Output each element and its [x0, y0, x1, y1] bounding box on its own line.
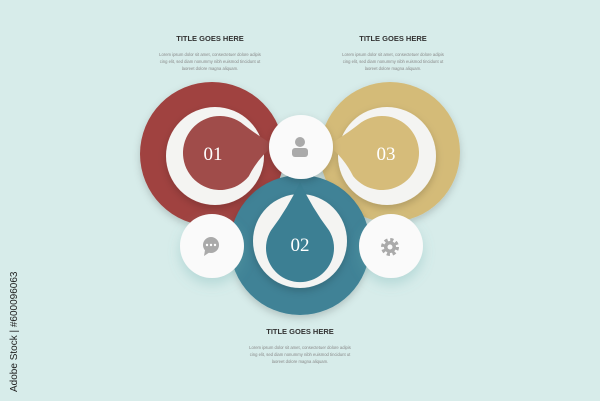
text block: top left	[159, 34, 261, 71]
text block: top left: laoreet dolore magna aliquam.	[182, 66, 238, 71]
text block: top right: cing elit, sed diam nonummy nibh euismod tincidunt ut	[343, 59, 444, 64]
text block: top left: cing elit, sed diam nonummy nibh euismod tincidunt ut	[160, 59, 261, 64]
icon: chat in left circle	[180, 214, 244, 278]
icon: gear in right circle	[359, 214, 423, 278]
panel: outer rings	[140, 82, 460, 315]
text block: bottom: laoreet dolore magna aliquam.	[272, 359, 328, 364]
text block: bottom: Lorem ipsum dolor sit amet, consectetuer dolore adipis	[249, 345, 351, 350]
text block: top right: laoreet dolore magna aliquam.	[365, 66, 421, 71]
text block: bottom: TITLE GOES HERE	[266, 327, 334, 336]
panel: red circle 01: 01	[204, 144, 222, 165]
panel: red circle 01	[166, 107, 274, 205]
text block: top right: Lorem ipsum dolor sit amet, consectetuer dolore adipis	[342, 52, 444, 57]
text block: top left: Lorem ipsum dolor sit amet, consectetuer dolore adipis	[159, 52, 261, 57]
text block: bottom: cing elit, sed diam nonummy nibh euismod tincidunt ut	[250, 352, 351, 357]
panel: yellow circle 03	[328, 107, 436, 205]
watermark text: Adobe Stock | #600096063	[9, 271, 20, 392]
text block: top left: TITLE GOES HERE	[176, 34, 244, 43]
icon: person in top circle	[269, 115, 333, 179]
panel: yellow circle 03: 03	[376, 144, 396, 165]
text block: bottom	[249, 327, 351, 364]
text block: top right: TITLE GOES HERE	[359, 34, 427, 43]
panel: teal circle 02	[253, 182, 347, 288]
panel: teal circle 02: 02	[290, 235, 310, 256]
text block: top right	[342, 34, 444, 71]
